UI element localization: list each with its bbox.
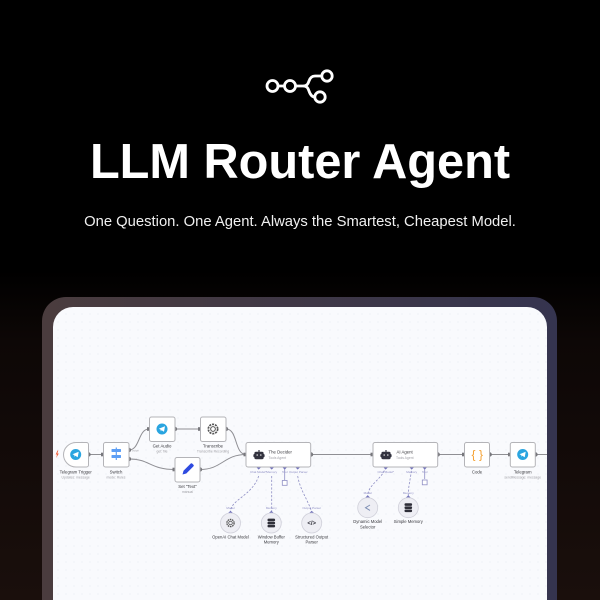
node: Switch: mode: Rules — [106, 476, 126, 480]
node: Get Audio: get: file — [157, 450, 168, 454]
node: The Decider: Tools Agent — [268, 456, 286, 460]
node: Transcribe: Transcribe Recording — [197, 450, 229, 454]
sub-node: Dynamic Model Selector: Dynamic Model — [353, 519, 382, 524]
node: Switch: Switch — [110, 470, 123, 474]
sub-node: Simple Memory: Simple Memory — [394, 519, 424, 524]
node: Code: Code — [472, 470, 483, 474]
node: Code: } — [479, 448, 483, 462]
connector dots — [86, 427, 538, 472]
node: Telegram Trigger — [56, 442, 92, 480]
node: The Decider — [246, 442, 311, 474]
sub-node: Window Buffer Memory: Memory — [264, 540, 280, 544]
node: AI Agent: Memory — [406, 470, 418, 474]
sub-node: Simple Memory — [394, 491, 424, 524]
node: Transcribe — [197, 417, 229, 454]
node: Set Text: manual — [182, 490, 193, 494]
node: Telegram Trigger: Updates: message — [62, 476, 90, 480]
node: The Decider: The Decider — [268, 450, 292, 454]
sub-node: Dynamic Model Selector: Model — [364, 491, 372, 495]
node: Telegram Trigger: Telegram Trigger — [60, 470, 92, 474]
title: LLM Router Agent — [90, 135, 510, 189]
sub-node: OpenAI Chat Model — [212, 506, 249, 540]
node: Telegram: Telegram — [514, 470, 532, 474]
node: Get Audio: Get Audio — [153, 444, 172, 448]
agent links — [230, 467, 412, 512]
panel frame — [42, 297, 557, 600]
node: The Decider: Tool — [282, 470, 288, 474]
sub-node: Structured Output Parser: </> — [307, 521, 317, 527]
node: Code — [464, 442, 490, 474]
node: Transcribe: Transcribe — [203, 444, 224, 448]
node: AI Agent — [373, 442, 438, 474]
node: The Decider: Memory — [266, 470, 278, 474]
sub-node: Structured Output Parser: Parser — [306, 540, 318, 544]
subtitle: One Question. One Agent. Always the Smartest, Cheapest Model. — [84, 214, 516, 230]
node: Switch: text — [132, 457, 137, 461]
sub-node: Structured Output Parser — [295, 506, 329, 544]
connectors — [88, 429, 547, 470]
node: AI Agent: AI Agent — [396, 450, 414, 454]
sub-node: Window Buffer Memory: Memory — [266, 506, 277, 510]
node: Set Text: Set "Text" — [178, 484, 197, 489]
node: The Decider: Chat Model* — [250, 470, 267, 474]
node: Switch: voice — [132, 448, 139, 452]
sub-node: Window Buffer Memory — [258, 506, 285, 544]
node: Switch — [104, 442, 139, 480]
node: The Decider: Output Parser — [289, 470, 308, 474]
node: Get Audio — [150, 417, 175, 454]
node: AI Agent: Chat Model* — [377, 470, 395, 474]
sub-node: Simple Memory: Memory — [403, 491, 414, 495]
node: Telegram — [504, 442, 541, 480]
sub-node: Structured Output Parser: Structured Output — [295, 534, 329, 540]
sub-node: Window Buffer Memory: Window Buffer — [258, 534, 285, 540]
node: AI Agent: Tool — [422, 470, 428, 474]
node: Code: { — [471, 448, 476, 462]
sub-node: OpenAI Chat Model: OpenAI Chat Model — [212, 534, 249, 540]
sub-node: OpenAI Chat Model: Model — [226, 506, 235, 510]
sub-node: Dynamic Model Selector — [353, 491, 382, 530]
node: AI Agent: Tools Agent — [396, 456, 414, 460]
node: Set Text — [175, 458, 200, 494]
node: Telegram: sendMessage: message — [504, 476, 541, 480]
sub-node: Dynamic Model Selector: Selector — [360, 524, 376, 530]
sub-node: Structured Output Parser: Output Parser — [302, 506, 321, 510]
panel canvas — [53, 307, 547, 600]
